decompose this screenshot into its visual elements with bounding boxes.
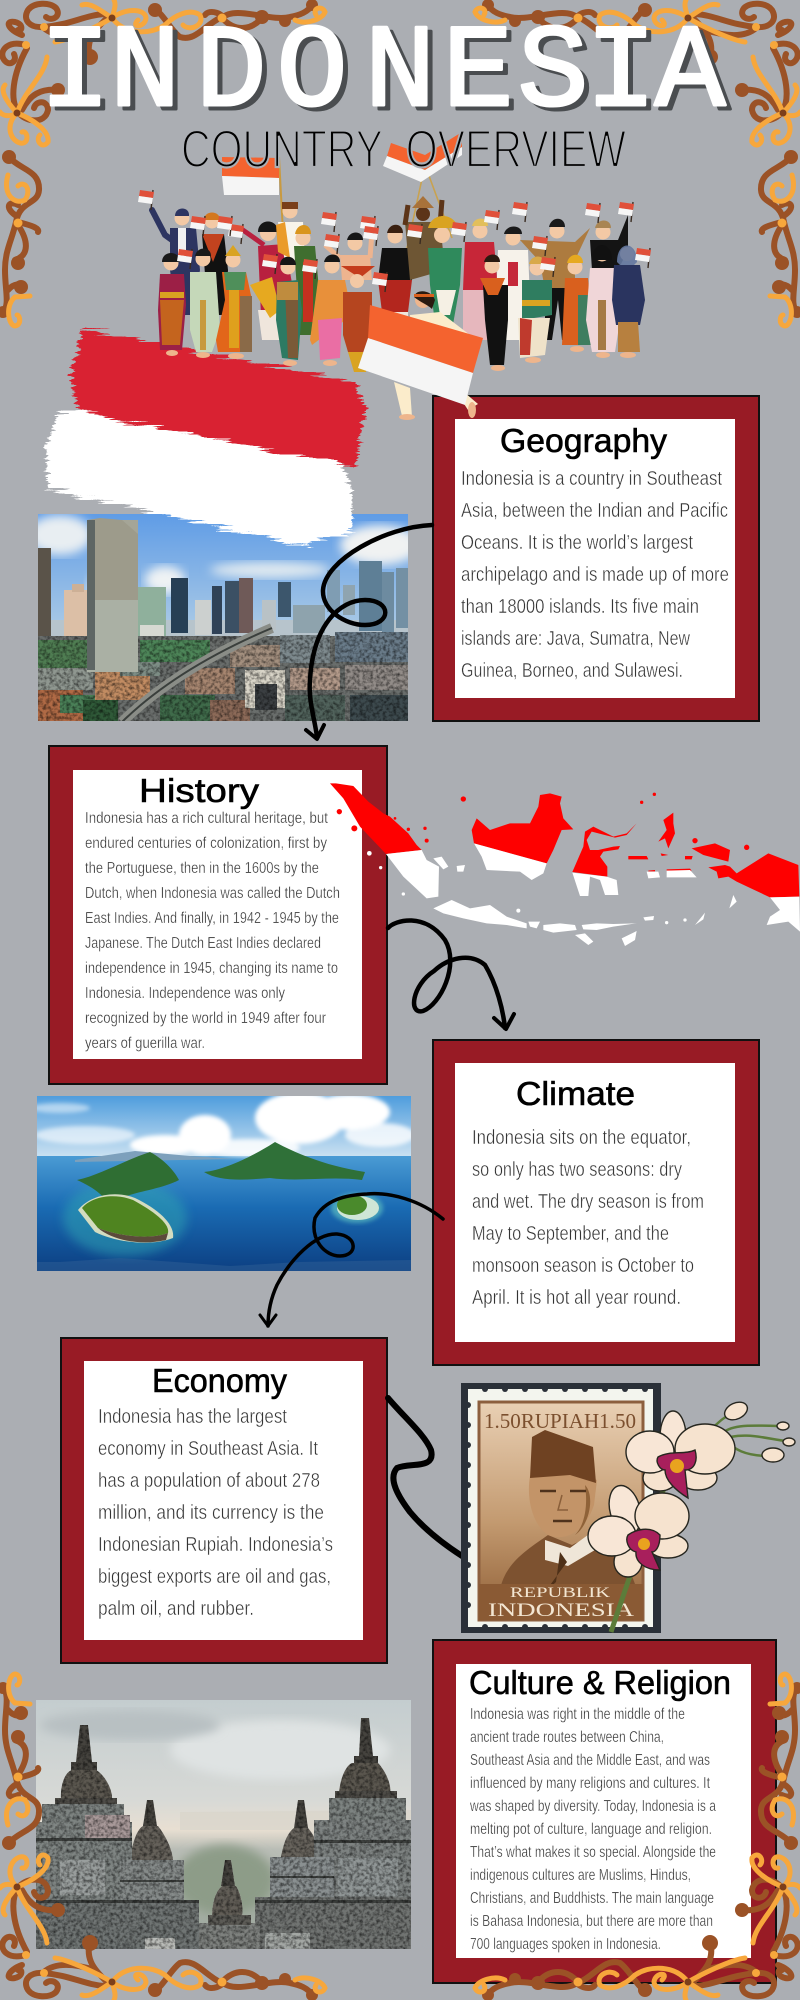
panel: Culture & Religion: [433, 1640, 776, 1983]
heading: Economy: Economy: [152, 1362, 287, 1399]
ornament: bottom-left corner: [0, 1674, 325, 2000]
text: Culture body: was shaped by diversity. Today, Indonesia is a: [469, 1798, 716, 1815]
text: Economy body: has a population of about 278: [98, 1470, 320, 1492]
arrow: Economy wavy connector: [388, 1398, 462, 1556]
text: Climate body: Indonesia sits on the equator,: [472, 1127, 691, 1149]
text: Culture body: Indonesia was right in the middle of the: [470, 1706, 685, 1723]
photo: Jakarta skyline: [28, 514, 420, 722]
panel: Climate: [433, 1040, 759, 1365]
heading: History: History: [139, 772, 260, 809]
text: Culture body: ancient trade routes between China,: [470, 1729, 664, 1746]
text: Culture body: That’s what makes it so special. Alongside the: [470, 1844, 716, 1861]
photo: postage stamp: INDONESIA: [488, 1600, 634, 1621]
text: Geography body: Guinea, Borneo, and Sulawesi.: [461, 660, 683, 682]
text: Economy body: palm oil, and rubber.: [98, 1598, 254, 1620]
title: INDONESIA: [40, 8, 726, 141]
front row figures: [158, 245, 645, 372]
ornament: top-right corner: [475, 0, 800, 326]
text: Culture body: melting pot of culture, language and religion.: [470, 1821, 712, 1838]
text: Geography body: [461, 468, 729, 682]
text: Economy body: Indonesia has the largest: [98, 1406, 287, 1428]
text: History body: independence in 1945, changing its name to: [85, 960, 338, 977]
text: Geography body: than 18000 islands. Its five main: [461, 596, 699, 618]
text: Economy body: million, and its currency is the: [98, 1502, 324, 1524]
subtitle: COUNTRY OVERVIEW: [181, 120, 626, 179]
text: History body: Japanese. The Dutch East Indies declared: [85, 935, 321, 952]
map of Indonesia in flag colours: [330, 783, 800, 946]
panel: Geography: [433, 396, 759, 721]
heading: Culture & Religion: Culture & Religion: [469, 1664, 731, 1701]
brush-stroke Indonesian flag: [46, 329, 365, 546]
city ground: [38, 632, 408, 721]
text: Culture body: influenced by many religions and cultures. It: [470, 1775, 711, 1792]
arrow: History to Climate: [388, 920, 514, 1029]
text: Geography body: Oceans. It is the world’s largest: [461, 532, 693, 554]
photo: Borobudur temple: [36, 1700, 411, 1949]
text: Culture body: [469, 1706, 716, 1953]
text: Culture body: Christians, and Buddhists. The main language: [470, 1890, 714, 1907]
heading: Geography: Geography: [500, 422, 668, 459]
temple stonework: [36, 1718, 411, 1949]
panel: Economy: [61, 1338, 387, 1663]
text: History body: Indonesia. Independence was only: [85, 985, 285, 1002]
icon: orchid flowers: [588, 1399, 795, 1632]
text: Geography body: Asia, between the Indian and Pacific: [461, 500, 728, 522]
text: History body: the Portuguese, then in the 1600s by the: [85, 860, 319, 877]
text: Economy body: biggest exports are oil and gas,: [98, 1566, 331, 1588]
photo: postage stamp: 1.50RUPIAH1.50: [484, 1409, 636, 1433]
text: History body: endured centuries of colonization, first by: [85, 835, 327, 852]
text: History body: East Indies. And finally, in 1942 - 1945 by the: [85, 910, 339, 927]
text: Culture body: 700 languages spoken in Indonesia.: [470, 1936, 661, 1953]
ornament: top-left corner: [0, 0, 325, 326]
text: History body: [85, 810, 340, 1052]
text: Culture body: indigenous cultures are Muslims, Hindus,: [470, 1867, 691, 1884]
text: Economy body: [98, 1406, 333, 1620]
arrow: Climate to Economy: [260, 1194, 443, 1326]
text: Geography body: islands are: Java, Sumatra, New: [461, 628, 690, 650]
heading: Climate: Climate: [516, 1075, 635, 1112]
large flags behind the subtitle: [222, 132, 462, 270]
text: Economy body: economy in Southeast Asia. It: [98, 1438, 318, 1460]
text: Culture body: Southeast Asia and the Middle East, and was: [470, 1752, 710, 1769]
text: Climate body: April. It is hot all year round.: [472, 1287, 681, 1309]
ornament: bottom-right corner: [475, 1674, 800, 2000]
back row figures: [152, 196, 628, 340]
text: Climate body: monsoon season is October to: [472, 1255, 694, 1277]
text: Climate body: and wet. The dry season is from: [472, 1191, 704, 1213]
photo: tropical islands: [30, 1092, 415, 1271]
text: History body: Dutch, when Indonesia was called the Dutch: [85, 885, 340, 902]
text: Climate body: May to September, and the: [472, 1223, 669, 1245]
photo: postage stamp: REPUBLIK: [510, 1585, 610, 1601]
text: History body: recognized by the world in 1949 after four: [85, 1010, 326, 1027]
text: Economy body: Indonesian Rupiah. Indonesia’s: [98, 1534, 333, 1556]
text: Culture body: is Bahasa Indonesia, but there are more than: [470, 1913, 713, 1930]
illustration: crowd in traditional dress: [138, 190, 651, 420]
arrow: Geography to History: [306, 525, 432, 739]
small hand flags: [138, 190, 651, 292]
man carrying large flag: [358, 291, 483, 420]
panel: History: [49, 746, 387, 1084]
text: History body: Indonesia has a rich cultural heritage, but: [85, 810, 329, 827]
text: History body: years of guerilla war.: [85, 1035, 205, 1052]
text: Climate body: so only has two seasons: dry: [472, 1159, 682, 1181]
text: Geography body: archipelago and is made up of more: [461, 564, 729, 586]
photo: postage stamp: [461, 1383, 661, 1633]
text: Climate body: [472, 1127, 704, 1309]
text: Geography body: Indonesia is a country in Southeast: [461, 468, 722, 490]
